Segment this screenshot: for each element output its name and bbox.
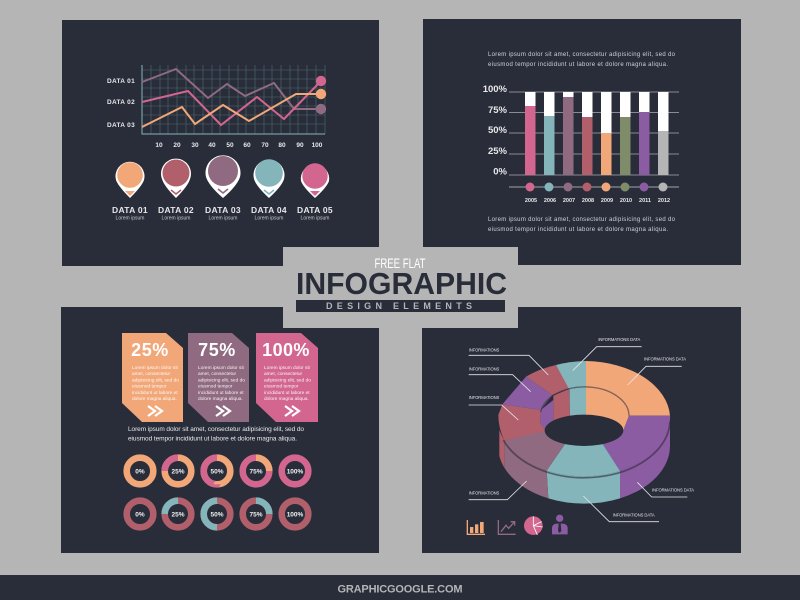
- timeline legend: [509, 182, 679, 204]
- bottom text block: Lorem ipsum dolor sit amet, consectetur adipisicing elit, sed do: [488, 217, 676, 223]
- pin: data 01: Lorem ipsum: [116, 216, 144, 222]
- title block: INFOGRAPHIC: [296, 267, 507, 301]
- panel: line chart and pins: [62, 20, 379, 266]
- footer: [0, 575, 800, 600]
- line chart: 30: [191, 142, 199, 149]
- pin: data 03: Lorem ipsum: [209, 216, 237, 222]
- card: 25%: amet, consectetur: [132, 371, 171, 377]
- text block: eiusmod tempor incididunt ut labore et dolore magna aliqua.: [128, 436, 297, 442]
- callouts: INFORMATIONS DATA: [613, 513, 655, 518]
- card: 100%: dolore magna aliqua.: [264, 396, 309, 402]
- line chart: DATA 02: [107, 99, 135, 106]
- title block: [283, 247, 518, 328]
- top text block: [488, 52, 676, 68]
- icon: person: [552, 515, 568, 534]
- icon: line chart: [498, 520, 516, 534]
- bar chart: 50%: [488, 125, 508, 136]
- card: 100%: eiusmod tempor: [264, 384, 299, 390]
- card: 100%: adipisicing elit, sed do: [264, 377, 311, 383]
- top text block: Lorem ipsum dolor sit amet, consectetur adipisicing elit, sed do: [488, 52, 676, 58]
- card: 100%: amet, consectetur: [264, 371, 303, 377]
- timeline legend: 2011: [639, 198, 651, 204]
- callouts: INFORMATIONS DATA: [644, 357, 686, 362]
- donut row: rose and teal: 75%: [249, 512, 263, 518]
- card: 25%: eiusmod tempor: [132, 384, 167, 390]
- bar chart: 100%: [483, 84, 508, 95]
- card: 75%: 75%: [198, 340, 236, 360]
- donut row: rose and teal: 25%: [171, 512, 185, 518]
- line chart: 60: [243, 142, 251, 149]
- pin: data 02: Lorem ipsum: [162, 216, 190, 222]
- callouts: INFORMATIONS DATA: [598, 337, 641, 342]
- timeline legend: 2010: [620, 198, 632, 204]
- pin: data 05: Lorem ipsum: [301, 216, 329, 222]
- card: 25%: incididunt ut labore et: [132, 390, 178, 396]
- card: 25%: [122, 333, 183, 422]
- card: 75%: [188, 333, 249, 422]
- bar chart: 0%: [493, 166, 508, 178]
- text block: Lorem ipsum dolor sit amet, consectetur adipisicing elit, sed do: [128, 426, 304, 433]
- pin: data 02: DATA 02: [158, 205, 194, 215]
- callouts: INFORMATIONS: [469, 347, 500, 352]
- pin: data 01: DATA 01: [112, 205, 148, 215]
- title block: DESIGN ELEMENTS: [326, 301, 472, 311]
- card: 75%: adipisicing elit, sed do: [198, 377, 245, 383]
- donut row: orange and pink: 75%: [249, 468, 263, 476]
- pin: data 03: DATA 03: [205, 205, 241, 215]
- panel: 3D donut chart: [422, 307, 741, 553]
- line chart: DATA 01: [107, 78, 135, 85]
- card: 100%: 100%: [262, 340, 310, 360]
- timeline legend: 2005: [525, 198, 537, 204]
- donut row: rose and teal: 50%: [210, 512, 224, 518]
- bar chart: [483, 84, 679, 178]
- title block: FREE FLAT: [374, 256, 426, 271]
- line chart: 10: [155, 142, 163, 149]
- donut row: orange and pink: 25%: [171, 468, 185, 476]
- bottom text block: [488, 217, 676, 233]
- card: 75%: incididunt ut labore et: [198, 390, 244, 396]
- donut row: rose and teal: 100%: [287, 512, 304, 518]
- card: 100%: incididunt ut labore et: [264, 390, 310, 396]
- line chart: 50: [226, 142, 234, 149]
- panel: percent cards and donuts: [61, 307, 379, 553]
- line chart: 80: [278, 142, 286, 149]
- 3D donut: [498, 361, 670, 504]
- donut row: rose and teal: 0%: [135, 512, 145, 518]
- callouts: INFORMATIONS: [469, 490, 500, 495]
- callouts: [469, 337, 694, 522]
- card: 75%: amet, consectetur: [198, 371, 237, 377]
- pin: data 04: DATA 04: [251, 205, 287, 215]
- timeline legend: 2008: [582, 198, 594, 204]
- footer: GRAPHICGOOGLE.COM: [338, 584, 462, 596]
- donut row: orange and pink: 100%: [287, 468, 304, 476]
- card: 75%: eiusmod tempor: [198, 384, 233, 390]
- line chart: [107, 65, 326, 149]
- bar chart: 25%: [488, 146, 508, 157]
- icon: bar chart: [467, 520, 485, 534]
- card: 25%: dolore magna aliqua.: [132, 396, 177, 402]
- timeline legend: 2009: [601, 198, 613, 204]
- top text block: eiusmod tempor incididunt ut labore et dolore magna aliqua.: [488, 62, 668, 68]
- card: 25%: 25%: [131, 340, 169, 360]
- pin: data 04: [251, 159, 287, 222]
- card: 100%: [256, 333, 318, 422]
- callouts: INFORMATIONS: [469, 395, 500, 400]
- panel: stacked bar chart: [423, 19, 741, 265]
- card: 75%: dolore magna aliqua.: [198, 396, 243, 402]
- donut row: orange and pink: 0%: [135, 468, 145, 476]
- timeline legend: 2006: [544, 198, 556, 204]
- line chart: 90: [296, 142, 304, 149]
- bar chart: 75%: [488, 105, 508, 116]
- icon: pie chart: [524, 516, 543, 535]
- card: 100%: Lorem ipsum dolor sit: [264, 365, 311, 371]
- callouts: INFORMATIONS: [469, 366, 500, 371]
- pin: data 03: [205, 155, 241, 222]
- donut row: orange and pink: [127, 458, 308, 484]
- bottom text block: eiusmod tempor incididunt ut labore et dolore magna aliqua.: [488, 227, 668, 233]
- callouts: INFORMATIONS DATA: [652, 488, 694, 493]
- line chart: DATA 03: [107, 122, 135, 129]
- pin: data 02: [158, 159, 194, 222]
- donut row: orange and pink: 50%: [210, 468, 224, 476]
- donut row: rose and teal: [127, 501, 308, 527]
- line chart: 20: [173, 142, 181, 149]
- line chart: 100: [312, 142, 323, 149]
- pin: data 01: [112, 162, 148, 222]
- pin: data 04: Lorem ipsum: [255, 216, 283, 222]
- card: 25%: adipisicing elit, sed do: [132, 377, 179, 383]
- timeline legend: 2007: [563, 198, 575, 204]
- line chart: 70: [261, 142, 269, 149]
- pin: data 05: DATA 05: [297, 205, 333, 215]
- card: 75%: Lorem ipsum dolor sit: [198, 365, 245, 371]
- line chart: 40: [208, 142, 216, 149]
- card: 25%: Lorem ipsum dolor sit: [132, 365, 179, 371]
- pin: data 05: [297, 163, 333, 222]
- timeline legend: 2012: [658, 198, 670, 204]
- text block: [128, 426, 304, 442]
